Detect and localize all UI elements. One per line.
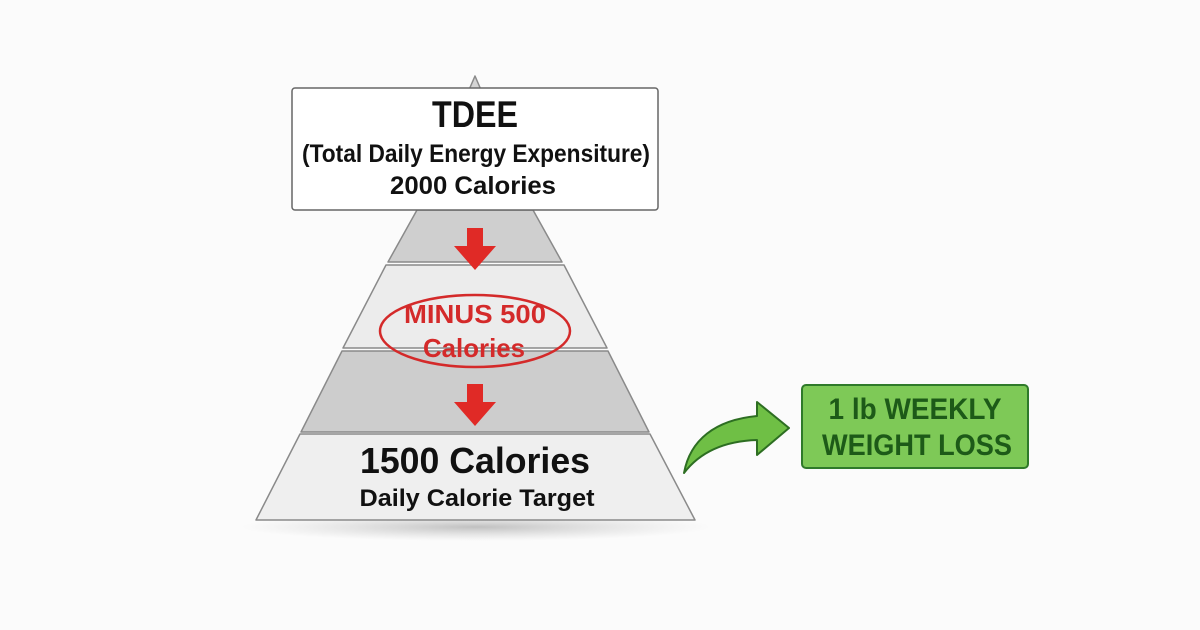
apex tier [417, 76, 533, 210]
TDEE box: (Total Daily Energy Expensiture) [302, 140, 650, 168]
pyramid shadow [241, 513, 711, 541]
TDEE box: 2000 Calories [390, 172, 556, 200]
callout: minus 500 [380, 295, 570, 367]
callout: minus 500: Calories [423, 333, 525, 363]
tier 4 [256, 434, 695, 520]
tier 3 [301, 351, 649, 432]
result box: 1 lb WEEKLY [828, 393, 1002, 426]
pyramid [256, 76, 695, 520]
arrow: green curved [684, 402, 789, 473]
bottom tier text [360, 440, 594, 512]
arrow: red down 2 [454, 384, 496, 426]
arrow: red down 1 [454, 228, 496, 270]
callout: minus 500: MINUS 500 [404, 299, 546, 329]
TDEE box: TDEE [432, 94, 518, 135]
result box [802, 385, 1028, 468]
bottom tier text: Daily Calorie Target [360, 485, 594, 512]
bottom tier text: 1500 Calories [360, 440, 590, 481]
tier 2 [343, 265, 607, 348]
result box: WEIGHT LOSS [822, 429, 1012, 462]
tier 1 [388, 210, 562, 262]
TDEE box [292, 88, 658, 210]
